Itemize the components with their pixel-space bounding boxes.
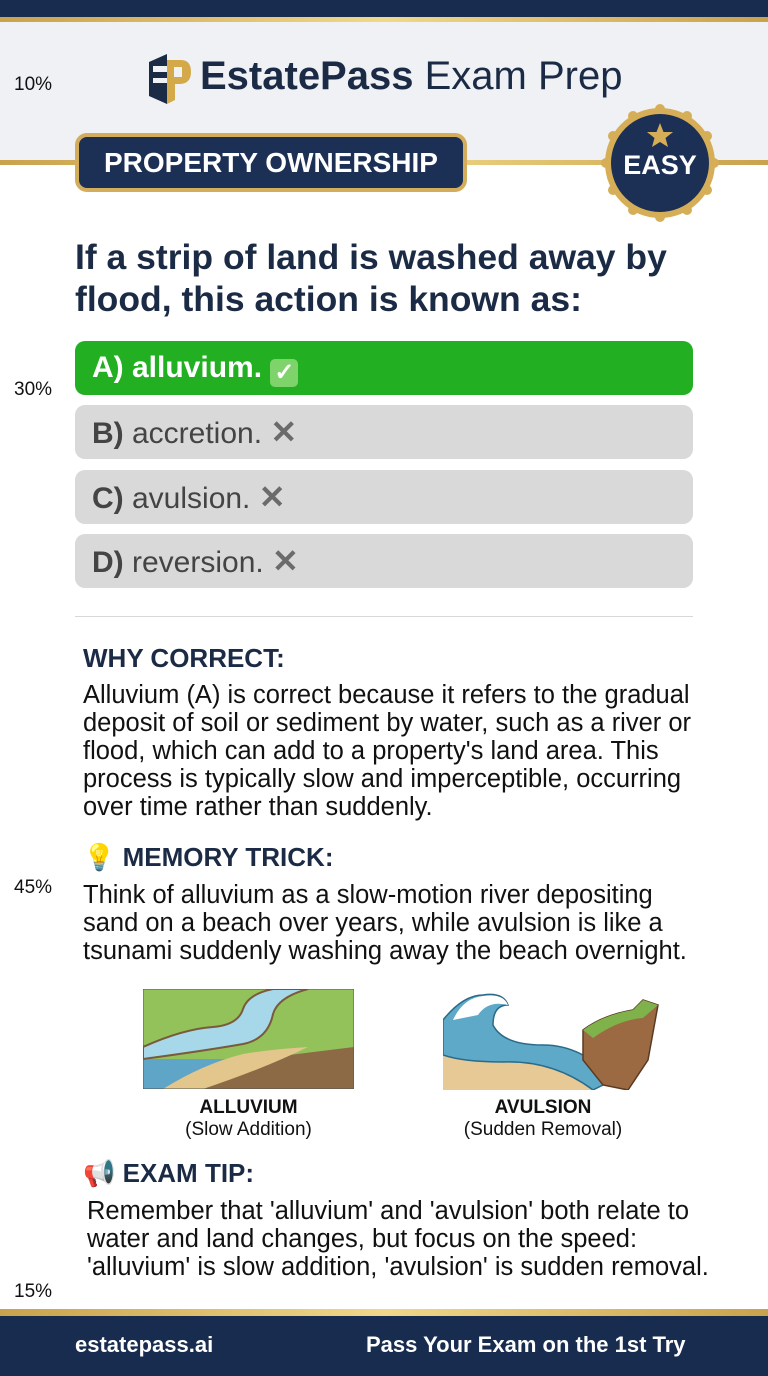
option A correct: ✓ [274, 359, 294, 386]
caption avulsion [464, 1097, 622, 1140]
category pill: PROPERTY OWNERSHIP [104, 147, 438, 178]
memory trick body: Think of alluvium as a slow-motion river depositing [83, 881, 653, 909]
option A correct: A) alluvium. [92, 351, 262, 384]
percent label 10%: 10% [14, 74, 52, 95]
why correct body: over time rather than suddenly. [83, 793, 433, 821]
caption alluvium: (Slow Addition) [185, 1119, 312, 1140]
why correct body [83, 681, 691, 821]
exam tip body: water and land changes, but focus on the speed: [87, 1225, 637, 1253]
memory trick body [83, 881, 687, 965]
header band [0, 0, 768, 164]
difficulty badge [601, 104, 718, 222]
option B: B) accretion. ✕ [92, 414, 297, 450]
caption avulsion: (Sudden Removal) [464, 1119, 622, 1140]
illustration: alluvium [143, 989, 354, 1089]
option A correct [75, 341, 693, 395]
why correct body: deposit of soil or sediment by water, such as a river or [83, 709, 691, 737]
memory trick heading: 💡 MEMORY TRICK: [83, 842, 333, 872]
exam tip heading: 📢 EXAM TIP: [83, 1158, 254, 1188]
option D: D) reversion. ✕ [92, 543, 299, 579]
option C [75, 470, 693, 524]
caption avulsion: AVULSION [495, 1097, 591, 1118]
footer tagline: Pass Your Exam on the 1st Try [366, 1332, 686, 1357]
memory trick body: sand on a beach over years, while avulsion is like a [83, 909, 663, 937]
exam tip body: 'alluvium' is slow addition, 'avulsion' is sudden removal. [87, 1253, 709, 1281]
footer [0, 1309, 768, 1376]
why correct body: process is typically slow and imperceptible, occurring [83, 765, 681, 793]
exam tip body: Remember that 'alluvium' and 'avulsion' both relate to [87, 1197, 689, 1225]
illustration: avulsion [443, 994, 659, 1090]
percent label 45%: 45% [14, 877, 52, 898]
why correct body: Alluvium (A) is correct because it refers to the gradual [83, 681, 690, 709]
top navy bar [0, 0, 768, 17]
option C: C) avulsion. ✕ [92, 479, 286, 515]
why correct heading: WHY CORRECT: [83, 643, 285, 673]
logo: EstatePass Exam Prep [200, 54, 622, 98]
memory trick body: tsunami suddenly washing away the beach overnight. [83, 937, 687, 965]
footer url: estatepass.ai [75, 1332, 213, 1357]
question: If a strip of land is washed away by flood, this action is known as: [75, 237, 667, 319]
difficulty badge: EASY [623, 150, 697, 180]
percent label 15%: 15% [14, 1281, 52, 1302]
why correct body: flood, which can add to a property's land area. This [83, 737, 659, 765]
option B [75, 405, 693, 459]
percent label 30%: 30% [14, 379, 52, 400]
caption alluvium [185, 1097, 312, 1140]
category pill [75, 133, 467, 192]
option D [75, 534, 693, 588]
caption alluvium: ALLUVIUM [199, 1097, 298, 1118]
exam tip body [87, 1197, 709, 1281]
